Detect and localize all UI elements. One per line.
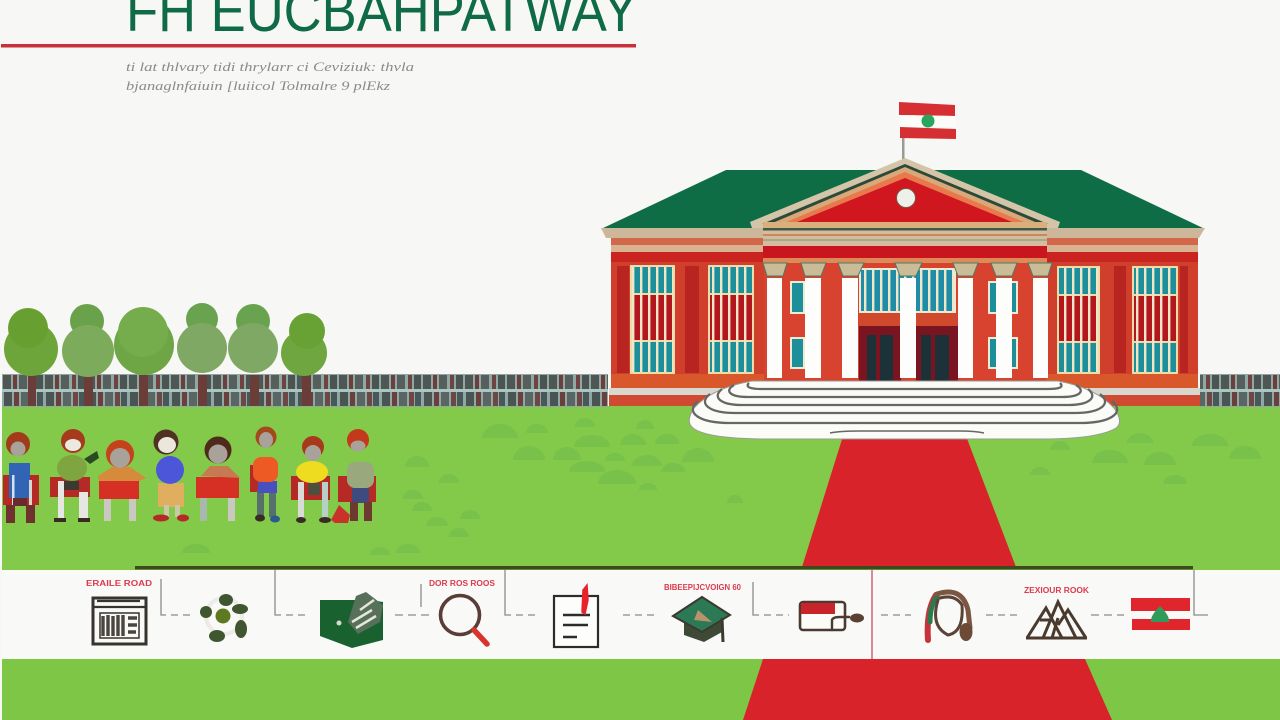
icon: document with pen xyxy=(554,585,598,647)
student 5 xyxy=(196,436,240,521)
student 6 xyxy=(250,426,280,522)
columns xyxy=(767,278,1048,378)
timeline white strip xyxy=(2,570,1280,659)
wall recess panels xyxy=(617,266,1188,373)
portico xyxy=(763,228,1052,385)
timeline labels: DOR ROS ROOS xyxy=(429,579,496,588)
school building xyxy=(601,158,1205,439)
steps xyxy=(689,381,1120,439)
trees xyxy=(4,303,327,406)
doors xyxy=(859,326,958,382)
student 2 xyxy=(50,429,99,522)
icon: open book xyxy=(320,592,383,648)
icon: calendar xyxy=(93,598,146,644)
red carpet lower xyxy=(743,659,1112,720)
student 1 xyxy=(3,432,39,523)
main wall xyxy=(611,262,1198,388)
student 4 xyxy=(153,430,189,522)
flag on building xyxy=(899,102,956,160)
subtitle text block: bjanaglnfaiuin [luiicol Tolmalre 9 plEkz xyxy=(126,78,390,93)
wall base bands xyxy=(609,374,1200,406)
student 3 xyxy=(98,440,146,521)
icon: mountains xyxy=(1026,602,1087,638)
capitals xyxy=(763,263,1052,276)
timeline labels xyxy=(86,579,1089,595)
central windows xyxy=(859,268,956,327)
timeline bar line xyxy=(135,566,1193,570)
timeline connectors xyxy=(161,570,1208,615)
icon: leaf ring xyxy=(200,594,248,642)
pediment xyxy=(750,158,1060,228)
icon: magnifying glass xyxy=(440,596,487,644)
subtitle text block: ti lat thlvary tidi thrylarr ci Ceviziuk: thvla xyxy=(126,59,415,74)
title underline xyxy=(1,44,636,48)
window right 1 xyxy=(1057,266,1100,374)
timeline labels: BIBEEPIJCVOIGN 60 xyxy=(664,583,742,592)
red carpet upper xyxy=(802,436,1016,567)
timeline labels: ERAILE ROAD xyxy=(86,579,152,588)
window left 2 xyxy=(708,265,754,374)
lawn upper xyxy=(2,406,1280,571)
strip divider xyxy=(871,570,873,659)
fence right xyxy=(1200,374,1280,407)
lawn tufts xyxy=(182,418,1261,555)
timeline labels: ZEXIOUR ROOK xyxy=(1024,586,1089,595)
fence left xyxy=(2,374,608,407)
icon: id card xyxy=(800,602,864,630)
roof xyxy=(601,170,1205,229)
students row xyxy=(3,426,376,523)
subtitle text block xyxy=(126,59,415,93)
icon: Lebanese flag xyxy=(1131,598,1190,630)
icon: graduation cap xyxy=(673,597,730,642)
window left 1 xyxy=(630,265,675,374)
side windows xyxy=(790,281,1018,369)
icon: coiled rope xyxy=(928,592,972,641)
window right 2 xyxy=(1132,266,1178,374)
student 8 xyxy=(331,429,376,523)
lawn lower xyxy=(2,659,1280,720)
cornice xyxy=(601,228,1205,262)
student 7 xyxy=(291,436,331,523)
